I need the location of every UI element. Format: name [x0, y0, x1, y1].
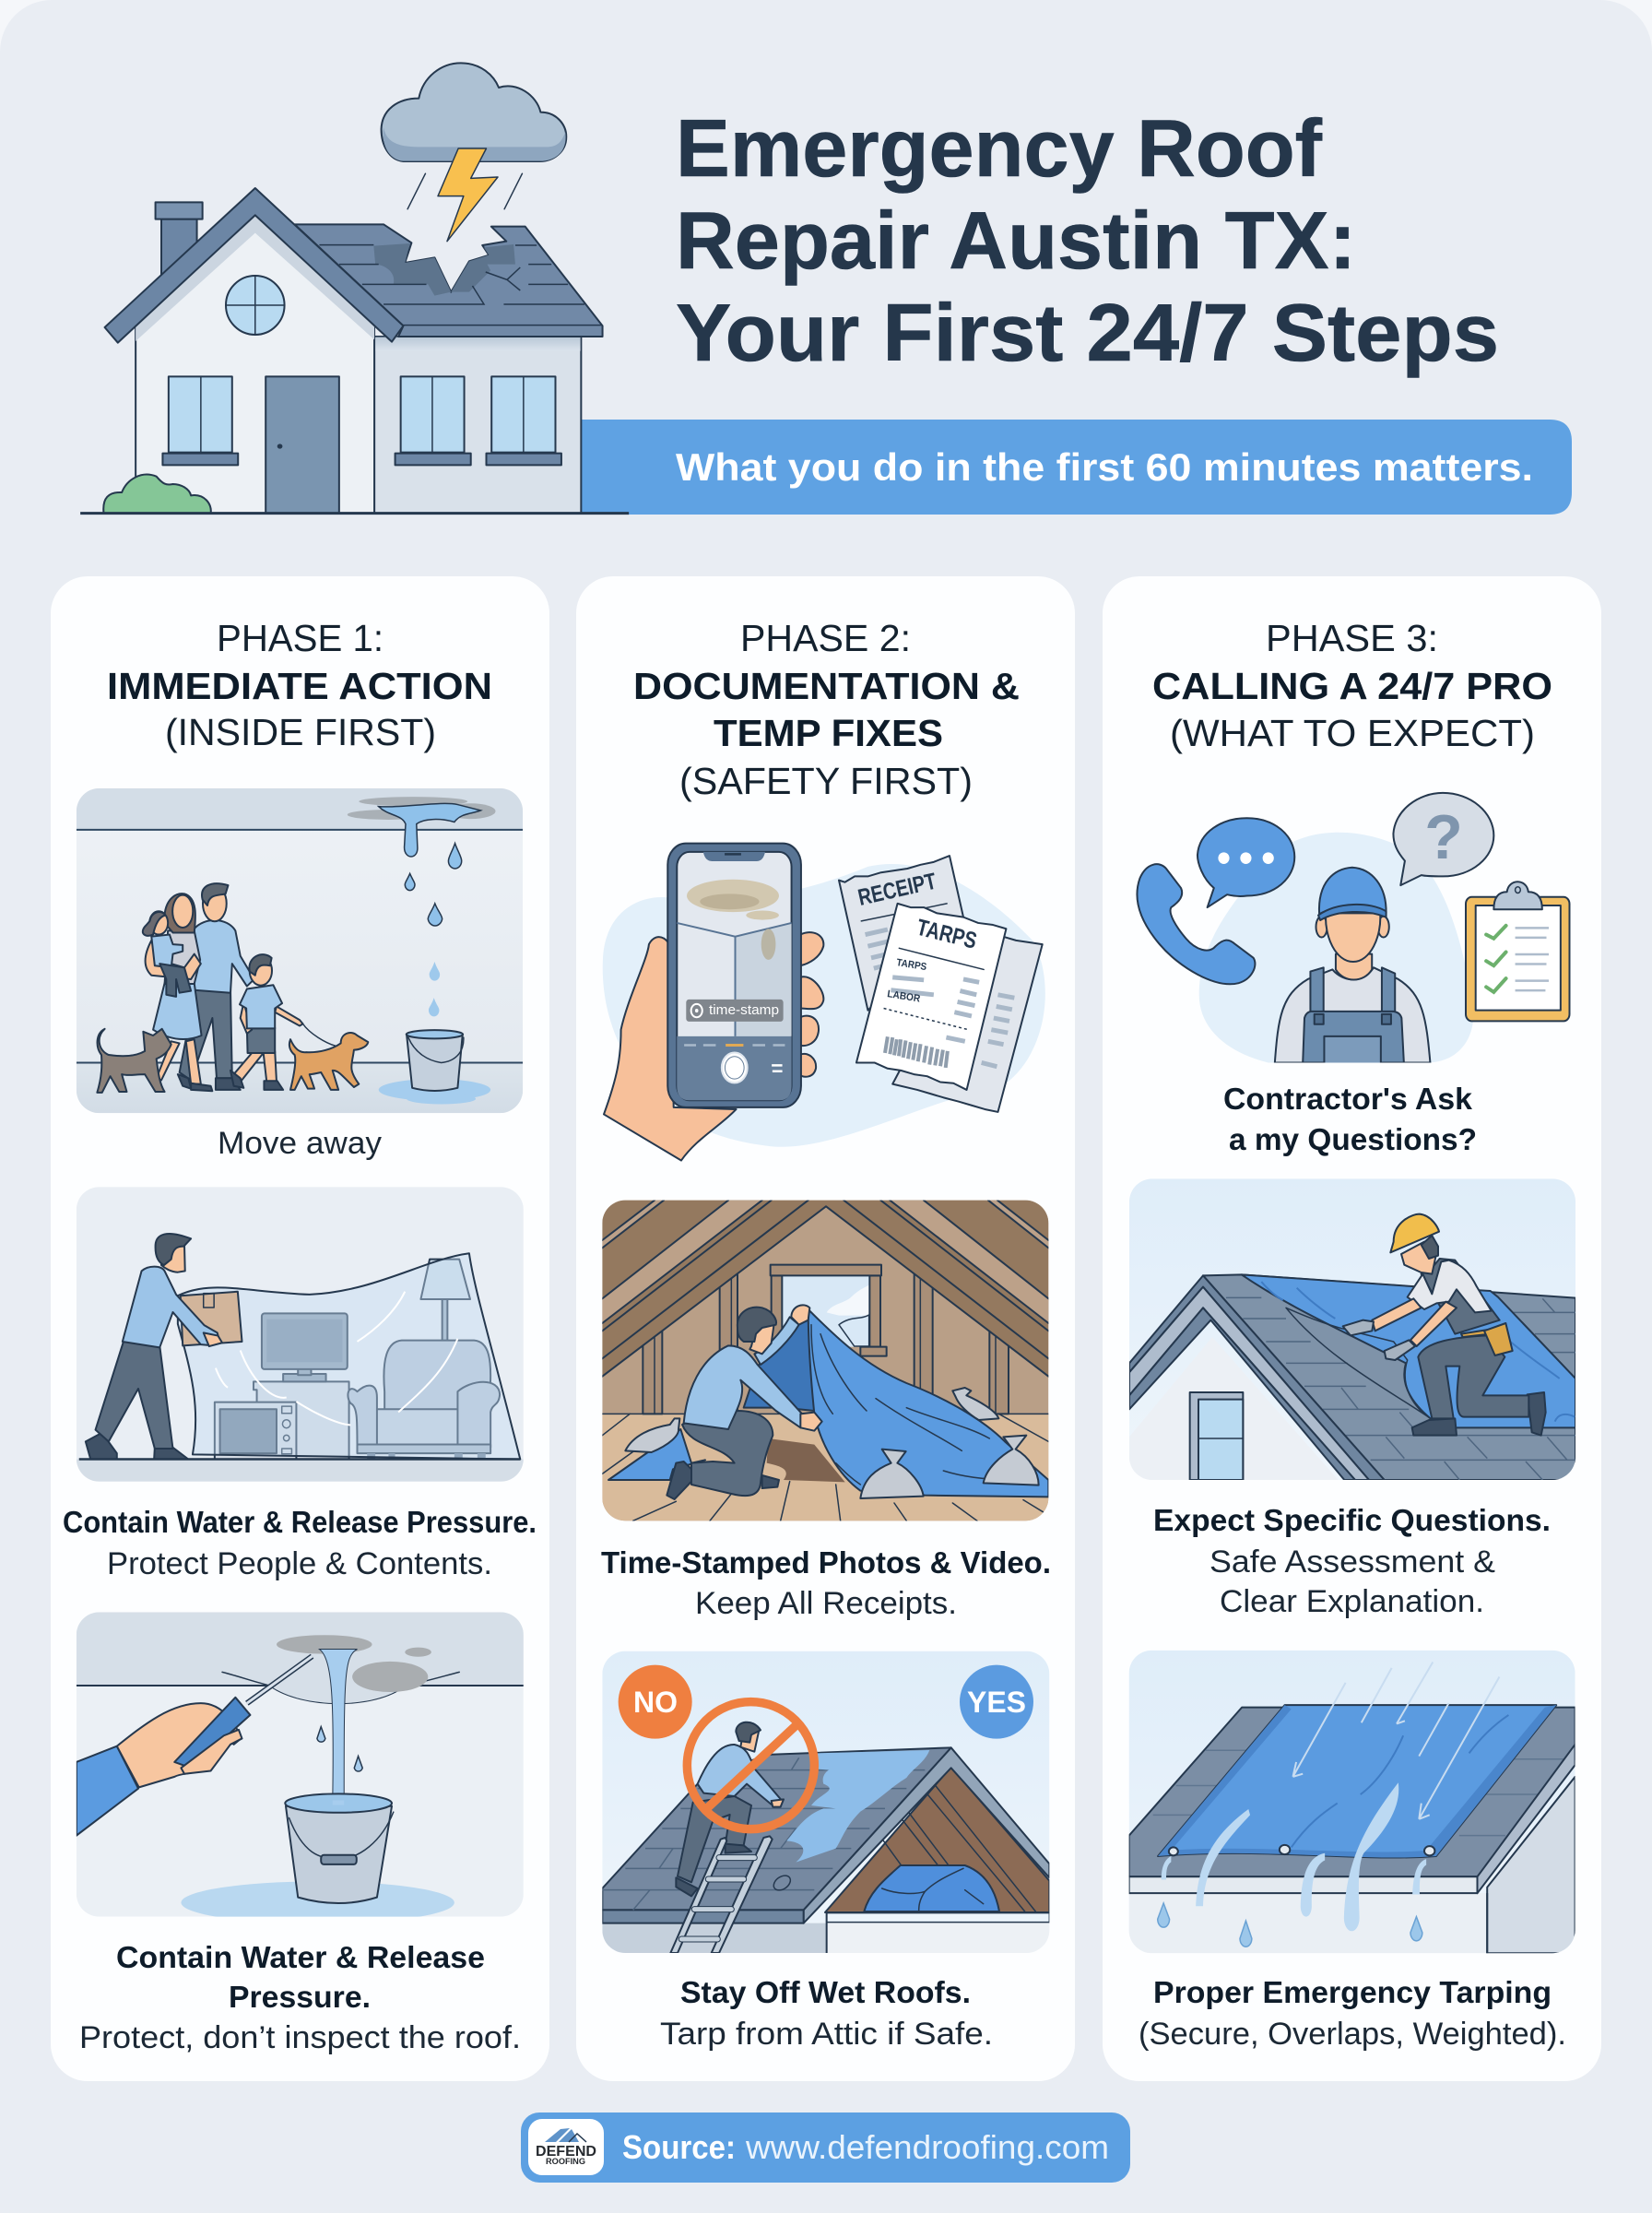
caption: expect specific questions: Safe Assessment &	[1210, 1544, 1495, 1580]
icon: contractor	[1275, 868, 1430, 1068]
heading: phase 3: CALLING A 24/7 PRO	[1152, 665, 1552, 707]
icon: kneeling man	[667, 1305, 822, 1499]
heading: phase 1: (INSIDE FIRST)	[165, 711, 436, 753]
title: Repair Austin TX:	[676, 195, 1356, 286]
caption: expect specific questions: Clear Explanation.	[1220, 1584, 1484, 1619]
icon: microwave	[215, 1402, 296, 1460]
icon: mother and toddler	[143, 893, 212, 1091]
caption: contain water 2: Contain Water & Release	[116, 1940, 485, 1974]
caption: time-stamped photos: Keep All Receipts.	[695, 1586, 957, 1621]
icon: armchair	[348, 1341, 500, 1460]
icon: man carrying box	[86, 1234, 242, 1460]
icon: man climbing ladder	[676, 1722, 784, 1896]
logo: defend roofing: DEFEND	[536, 2144, 596, 2160]
illustration: roofer installing tarp	[1129, 1178, 1575, 1480]
receipt and phone labels: RECEIPT	[856, 869, 938, 911]
banner text: What you do in the first 60 minutes matters.	[676, 445, 1533, 489]
caption: contractor's ask: a my Questions?	[1229, 1122, 1477, 1156]
icon: tan dog	[289, 1033, 368, 1090]
logo: defend roofing	[528, 2119, 604, 2175]
illustration: stay off wet roofs	[602, 1651, 1049, 1953]
receipt and phone labels	[709, 869, 979, 1018]
rafters	[602, 1201, 1048, 1377]
question mark: ?	[1424, 802, 1463, 872]
panel: phase 2	[576, 576, 1075, 2081]
header banner	[582, 420, 1572, 515]
heading: phase 2	[633, 617, 1020, 802]
caption: proper emergency tarping: (Secure, Overlaps, Weighted).	[1139, 2017, 1566, 2052]
caption: time-stamped photos: Time-Stamped Photos & Video.	[601, 1545, 1051, 1580]
icon: clipboard checklist	[1466, 882, 1569, 1021]
caption: contain water 2: Pressure.	[229, 1980, 371, 2014]
caption: contain water 1: Contain Water & Release Pressure.	[63, 1505, 537, 1539]
icon: receipts	[839, 856, 1043, 1112]
caption: stay off wet roofs	[660, 1975, 993, 2052]
caption: time-stamped photos	[601, 1545, 1051, 1621]
badge: no	[619, 1665, 692, 1739]
icon: grey dog	[97, 1029, 171, 1093]
panel: phase 3	[1103, 576, 1601, 2081]
caption: contractor's ask: Contractor's Ask	[1223, 1082, 1473, 1116]
icon: bush	[103, 475, 211, 514]
illustration: family moving away from leak	[77, 788, 523, 1113]
heading: phase 2: TEMP FIXES	[714, 712, 943, 754]
badge labels: YES	[967, 1686, 1026, 1719]
icon: no symbol	[687, 1702, 814, 1829]
gable rake	[1129, 1275, 1385, 1480]
icon: round attic window	[226, 276, 285, 335]
water drops	[1158, 1903, 1422, 1947]
illustration: proper emergency tarping	[1129, 1651, 1575, 1953]
wall studs	[643, 1271, 1009, 1414]
icon: bucket and puddle	[379, 1030, 490, 1105]
heading: phase 3	[1152, 617, 1552, 754]
rain lines	[1292, 1663, 1499, 1819]
panel: phase 1	[51, 576, 549, 2081]
rain strokes	[407, 173, 522, 209]
icon: ladder	[670, 1836, 773, 1953]
caption: contain water 1: Protect People & Contents.	[107, 1546, 492, 1581]
illustration: puncture ceiling bulge with screwdriver	[77, 1612, 524, 1923]
icon: bucket	[285, 1793, 394, 1903]
badge labels	[633, 1686, 1026, 1719]
receipt and phone labels: time-stamp	[709, 1002, 779, 1018]
illustration: protect contents with plastic sheeting	[77, 1187, 524, 1482]
badge: yes	[960, 1665, 1033, 1739]
caption: proper emergency tarping: Proper Emergency Tarping	[1153, 1975, 1552, 2009]
logo: defend roofing: ROOFING	[546, 2157, 585, 2166]
illustration: phone photo and receipts	[603, 844, 1045, 1161]
shingled roof	[1203, 1274, 1575, 1480]
title: Emergency Roof	[676, 102, 1323, 194]
shingled roof	[602, 1747, 951, 1923]
icon: blue tarp	[1158, 1705, 1556, 1858]
icon: sandbags	[625, 1388, 1039, 1498]
water stream	[319, 1649, 357, 1805]
caption: proper emergency tarping	[1139, 1975, 1566, 2052]
icon: father	[178, 883, 254, 1090]
icon: hand with screwdriver	[77, 1656, 313, 1836]
gable and attic	[804, 1747, 1049, 1923]
title	[676, 102, 1499, 378]
icon: house windows	[162, 376, 561, 465]
icon: roofer with hard hat	[1343, 1214, 1546, 1436]
receipt and phone labels: LABOR	[887, 988, 921, 1005]
attic window	[771, 1265, 887, 1356]
floor hole	[767, 1438, 845, 1482]
icon: tv and stand	[254, 1313, 349, 1460]
photo stain	[687, 880, 779, 960]
caption: contractor's ask	[1223, 1082, 1477, 1156]
source text: www.defendroofing.com	[745, 2128, 1109, 2166]
ground line	[80, 512, 629, 515]
dormer window	[1190, 1392, 1243, 1480]
caption: contain water 2	[79, 1940, 521, 2055]
heading: phase 2: PHASE 2:	[740, 617, 911, 659]
heading: phase 2: (SAFETY FIRST)	[679, 760, 973, 802]
caption: contain water 2: Protect, don’t inspect the roof.	[79, 2020, 521, 2055]
icon: front door	[266, 376, 339, 514]
illustration: house with damaged roof under storm cloud	[80, 63, 629, 514]
icon: storm cloud	[382, 63, 566, 161]
heading: phase 1: IMMEDIATE ACTION	[107, 665, 492, 707]
icon: hand holding phone	[604, 932, 823, 1161]
icon: blue tarp	[1242, 1274, 1575, 1427]
caption: stay off wet roofs: Tarp from Attic if Safe.	[660, 2017, 993, 2052]
water drops	[317, 1727, 362, 1771]
ceiling stains	[277, 1635, 431, 1692]
damaged side roof	[295, 224, 603, 337]
source text: Source:	[622, 2128, 736, 2166]
icon: boy walking dog	[230, 954, 336, 1090]
title: Your First 24/7 Steps	[676, 287, 1499, 378]
receipt and phone labels: TARPS	[914, 915, 979, 954]
icon: blue tarp	[608, 1309, 1048, 1497]
icon: phone handset	[1137, 864, 1255, 984]
caption: move away: Move away	[218, 1126, 382, 1161]
footer source bar	[521, 2112, 1130, 2183]
illustration: contractor phone call	[1137, 793, 1569, 1068]
heading: phase 1: PHASE 1:	[217, 617, 384, 659]
icon: lamp	[420, 1260, 470, 1346]
icon: smartphone	[667, 844, 801, 1107]
heading: phase 2: DOCUMENTATION &	[633, 665, 1020, 707]
wet patch	[786, 1750, 929, 1863]
icon: lightning bolt	[438, 148, 498, 242]
caption: stay off wet roofs: Stay Off Wet Roofs.	[680, 1975, 971, 2009]
heading: phase 3: (WHAT TO EXPECT)	[1170, 712, 1535, 754]
icon: question bubble	[1393, 793, 1493, 885]
receipt and phone labels: TARPS	[896, 957, 927, 973]
icon: ceiling water leak	[348, 797, 495, 1016]
caption: contain water 1	[63, 1505, 537, 1581]
plastic sheeting	[178, 1253, 520, 1460]
icon: chat bubble	[1198, 818, 1294, 907]
heading: phase 1	[107, 617, 492, 753]
heading: phase 3: PHASE 3:	[1266, 617, 1438, 659]
caption: expect specific questions	[1153, 1503, 1551, 1619]
water runoff	[1162, 1782, 1426, 1931]
caption: expect specific questions: Expect Specific Questions.	[1153, 1503, 1551, 1537]
puddle	[181, 1881, 454, 1917]
badge labels: NO	[633, 1686, 678, 1719]
illustration: attic tarp with sandbags	[602, 1201, 1048, 1521]
